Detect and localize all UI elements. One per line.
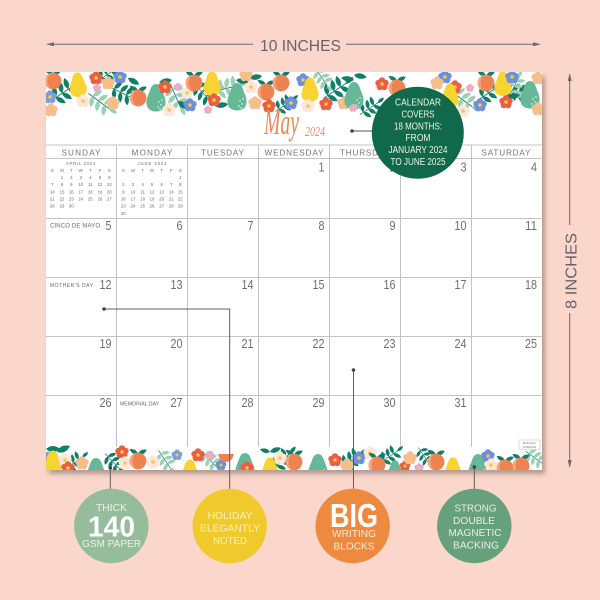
badge: big writing blocks: BLOCKS	[334, 540, 374, 552]
mini calendar: April 2024: 5	[99, 175, 102, 180]
mini calendar: April 2024: APRIL 2024	[66, 161, 96, 166]
mini calendar: June 2024: 4	[142, 182, 145, 187]
leader: calendar covers	[350, 129, 380, 133]
badge: strong double magnetic backing: MAGNETIC	[448, 527, 502, 539]
sheet shadow	[49, 76, 545, 474]
date numbers: 15	[312, 278, 325, 292]
date numbers: 24	[454, 337, 467, 351]
callout: calendar covers 18 months: COVERS	[402, 110, 435, 120]
weekday headers: SUNDAY	[62, 148, 101, 157]
callout: calendar covers 18 months: JANUARY 2024	[388, 145, 448, 156]
mini calendar: June 2024: 11	[140, 189, 146, 194]
mini calendar: June 2024: 1	[179, 175, 182, 180]
publisher logo box	[519, 440, 540, 450]
mini calendar: June 2024: 15	[178, 189, 183, 194]
mini calendar: June 2024: 24	[131, 204, 136, 209]
mini calendar: April 2024: 4	[89, 175, 92, 180]
publisher logo box: & DESIGN	[523, 445, 536, 449]
mini calendar: June 2024: 14	[169, 189, 174, 194]
mini calendar: April 2024	[50, 161, 112, 209]
date numbers: 8	[318, 219, 325, 233]
mini calendar: April 2024: 13	[107, 182, 112, 187]
date numbers: 1	[318, 160, 325, 174]
mini calendar: June 2024: 16	[121, 196, 126, 202]
weekday headers: SATURDAY	[482, 148, 531, 157]
badge: 140 GSM paper: 140	[88, 512, 135, 544]
dimension arrow: 8 inches: 8 INCHES	[564, 233, 580, 309]
mini calendar: April 2024: 20	[107, 189, 112, 194]
mini calendar: April 2024: 28	[50, 204, 55, 209]
month title: May	[263, 102, 299, 142]
mini calendar: April 2024: 18	[88, 189, 93, 194]
date numbers: 20	[170, 337, 183, 351]
calendar sheet	[43, 63, 551, 486]
date numbers: 11	[525, 219, 537, 233]
month title: 2024	[305, 125, 325, 140]
badge: strong double magnetic backing: STRONG	[454, 502, 496, 514]
weekday headers: TUESDAY	[201, 148, 245, 157]
date numbers	[100, 160, 537, 410]
date numbers: 12	[100, 278, 112, 292]
mini calendar: April 2024: F	[99, 168, 102, 173]
top floral border	[46, 72, 542, 118]
mini calendar: April 2024: 23	[69, 196, 74, 202]
mini calendar: June 2024: 29	[178, 204, 183, 209]
badge: 140 GSM paper: GSM PAPER	[82, 539, 141, 550]
date numbers: 2	[390, 160, 396, 174]
mini calendar: June 2024: 8	[179, 182, 182, 187]
date numbers: 10	[454, 219, 467, 233]
mini calendar: June 2024: S	[179, 168, 182, 173]
holiday labels: MEMORIAL DAY	[120, 402, 160, 408]
mini calendar: June 2024: 2	[122, 182, 125, 187]
weekday headers	[62, 150, 530, 156]
weekday headers: MONDAY	[132, 148, 173, 157]
mini calendar: June 2024: T	[141, 168, 144, 173]
mini calendar: April 2024: 6	[108, 175, 111, 180]
mini calendar: April 2024: 25	[88, 196, 93, 202]
leader: magnetic backing	[472, 465, 476, 489]
mini calendar: April 2024: 8	[61, 182, 64, 187]
badge: holiday elegantly noted: HOLIDAY	[208, 510, 252, 522]
mini calendar: June 2024: F	[170, 168, 173, 173]
mini calendar: April 2024: 16	[69, 189, 74, 194]
mini calendar: June 2024: 22	[178, 196, 183, 202]
badge: big writing blocks: BIG	[330, 497, 378, 534]
mini calendar: June 2024: 17	[131, 196, 136, 202]
mini calendar: June 2024: M	[131, 168, 135, 173]
mini calendar: April 2024: 12	[98, 182, 103, 187]
holiday labels	[50, 224, 160, 408]
badge: holiday elegantly noted: ELEGANTLY	[200, 522, 260, 534]
date numbers: 29	[312, 396, 325, 410]
mini calendar: April 2024: 19	[98, 189, 103, 194]
bottom floral border	[46, 445, 542, 470]
mini calendar: April 2024: M	[60, 168, 64, 173]
holiday labels: CINCO DE MAYO	[50, 224, 100, 230]
date numbers: 18	[525, 278, 537, 292]
mini calendar: June 2024: 30	[121, 211, 126, 216]
mini calendar: April 2024: 1	[61, 175, 64, 180]
mini calendar: June 2024: 27	[159, 204, 165, 209]
badge: 140 GSM paper	[74, 489, 148, 563]
mini calendar: June 2024: T	[160, 168, 163, 173]
weekday headers: FRIDAY	[417, 148, 456, 157]
date numbers: 31	[454, 396, 467, 410]
mini calendar: June 2024	[121, 161, 183, 216]
date numbers: 27	[170, 396, 183, 410]
mini calendar: June 2024: 25	[140, 204, 146, 209]
mini calendar: April 2024: T	[89, 168, 92, 173]
mini calendar: April 2024: S	[108, 168, 111, 173]
date numbers: 3	[460, 160, 467, 174]
mini calendar: June 2024: S	[122, 168, 125, 173]
leader: holiday	[102, 307, 230, 489]
mini calendar: April 2024: 22	[60, 196, 65, 202]
mini calendar: June 2024: 18	[140, 196, 146, 202]
mini calendar: June 2024: 9	[122, 189, 125, 194]
mini calendar: June 2024: 23	[121, 204, 126, 209]
badge: big writing blocks	[316, 489, 390, 563]
mini calendar: April 2024: 9	[70, 182, 73, 187]
date numbers: 22	[312, 337, 325, 351]
mini calendar: April 2024: S	[51, 168, 54, 173]
badge: holiday elegantly noted: NOTED	[213, 535, 247, 547]
holiday labels: MOTHER'S DAY	[50, 283, 94, 289]
callout: calendar covers 18 months: CALENDAR	[395, 98, 441, 108]
date numbers: 5	[106, 219, 112, 233]
date numbers: 9	[390, 219, 396, 233]
date numbers: 16	[384, 278, 396, 292]
date numbers: 17	[454, 278, 467, 292]
date numbers: 30	[384, 396, 396, 410]
badge: strong double magnetic backing	[437, 489, 511, 563]
date numbers: 7	[248, 219, 254, 233]
badge: holiday elegantly noted	[192, 489, 267, 563]
callout: calendar covers 18 months: 18 MONTHS:	[394, 122, 442, 132]
callout: calendar covers 18 months	[372, 87, 464, 179]
dimension arrow: 10 inches	[46, 38, 541, 55]
date numbers: 14	[242, 278, 254, 292]
date numbers: 25	[525, 337, 537, 351]
mini calendar: April 2024: 2	[70, 175, 73, 180]
mini calendar: April 2024: 14	[50, 189, 55, 194]
mini calendar: June 2024: 28	[169, 204, 174, 209]
date numbers: 23	[384, 337, 396, 351]
mini calendar: June 2024: 13	[159, 189, 165, 194]
mini calendar: June 2024: 21	[169, 196, 174, 202]
mini calendar: June 2024: 7	[170, 182, 173, 187]
date numbers: 13	[170, 278, 183, 292]
mini calendar: April 2024: 24	[78, 196, 84, 202]
mini calendar: April 2024: 11	[88, 182, 93, 187]
date numbers: 19	[100, 337, 112, 351]
mini calendar: April 2024: 30	[69, 204, 74, 209]
mini calendar: June 2024: 19	[150, 196, 155, 202]
badge: strong double magnetic backing: DOUBLE	[453, 515, 495, 527]
mini calendar: June 2024: 10	[131, 189, 136, 194]
mini calendar: June 2024: W	[150, 168, 155, 173]
mini calendar: June 2024: 6	[161, 182, 164, 187]
mini calendar: April 2024: 27	[107, 196, 112, 202]
badge: strong double magnetic backing: BACKING	[453, 539, 499, 551]
weekday headers: THURSDAY	[340, 148, 391, 157]
badge: big writing blocks: WRITING	[332, 528, 376, 540]
date numbers: 21	[242, 337, 254, 351]
weekday headers: WEDNESDAY	[264, 148, 324, 157]
mini calendar: April 2024: 21	[50, 196, 55, 202]
mini calendar: April 2024: T	[70, 168, 73, 173]
mini calendar: June 2024: 3	[132, 182, 135, 187]
mini calendar: June 2024: JUNE 2024	[138, 161, 167, 166]
mini calendar: April 2024: 26	[98, 196, 103, 202]
calendar grid	[46, 145, 542, 447]
dimension arrow: 8 inches	[564, 73, 580, 468]
leader: writing blocks	[352, 368, 355, 489]
mini calendar: April 2024: 10	[78, 182, 84, 187]
callout: calendar covers 18 months: FROM	[406, 133, 430, 144]
mini calendar: June 2024: 5	[151, 182, 154, 187]
date numbers: 28	[242, 396, 254, 410]
callout: calendar covers 18 months: TO JUNE 2025	[390, 157, 446, 168]
date numbers: 4	[531, 160, 537, 174]
leader: paper	[108, 466, 112, 489]
mini calendar: June 2024: 12	[150, 189, 155, 194]
badge: 140 GSM paper: THICK	[96, 502, 127, 514]
mini calendar: June 2024: 20	[159, 196, 165, 202]
mini calendar: April 2024: 17	[78, 189, 84, 194]
publisher logo box: MONTHLY	[523, 441, 536, 445]
mini calendar: June 2024: 26	[150, 204, 155, 209]
mini calendar: April 2024: 7	[51, 182, 54, 187]
date numbers: 6	[176, 219, 183, 233]
mini calendar: April 2024: 15	[60, 189, 65, 194]
date numbers: 26	[100, 396, 112, 410]
mini calendar: April 2024: W	[79, 168, 84, 173]
dimension arrow: 10 inches: 10 INCHES	[260, 38, 341, 55]
mini calendar: April 2024: 3	[80, 175, 83, 180]
mini calendar: April 2024: 29	[60, 204, 65, 209]
